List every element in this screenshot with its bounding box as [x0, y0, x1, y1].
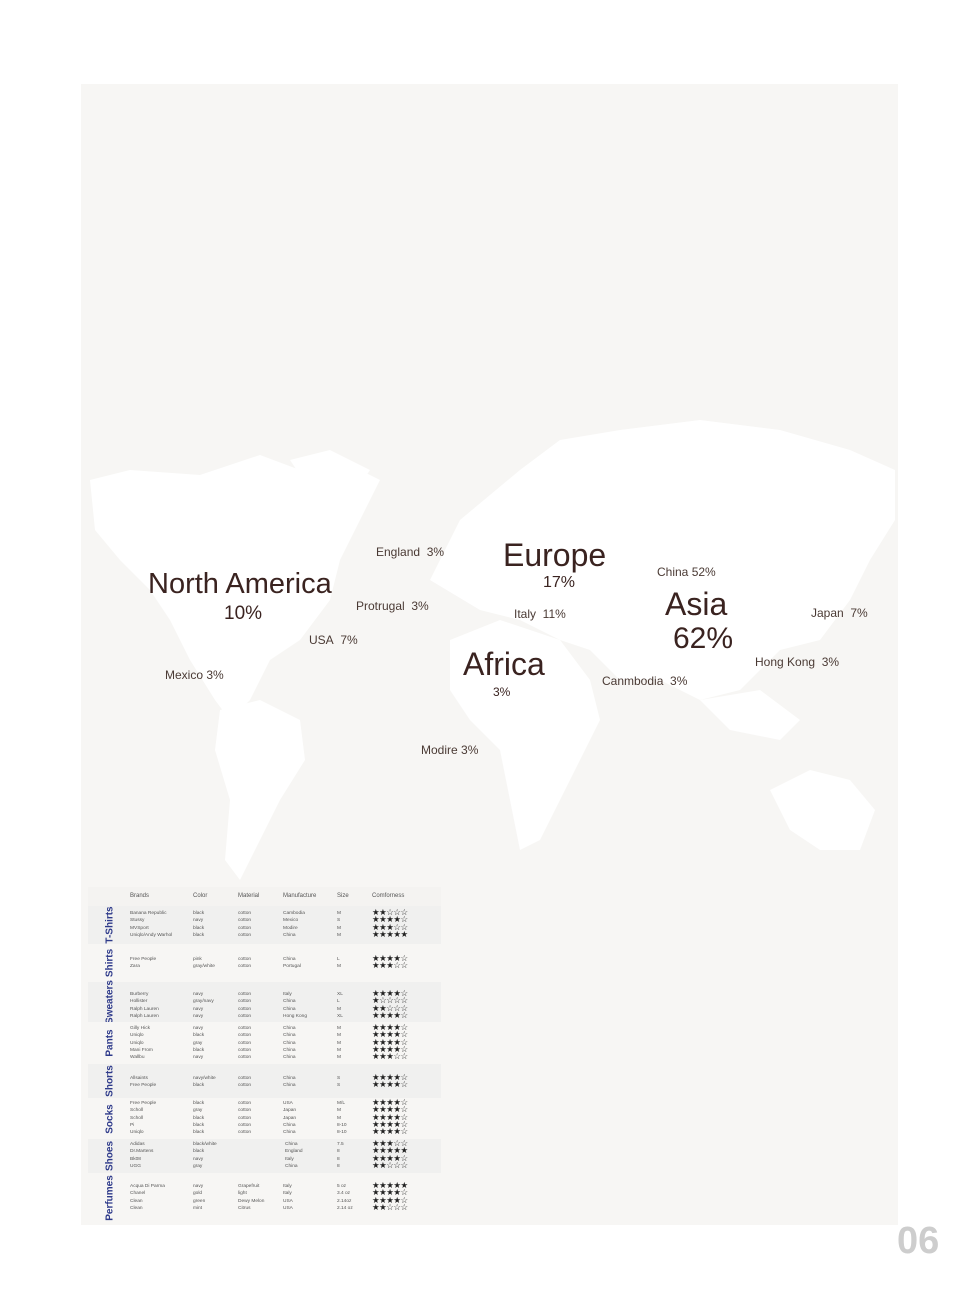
section: Perfumes: Italy Italy USA USA: [283, 1184, 293, 1211]
section: Perfumes: Grapefruit light Dewy Melon Citrus: [238, 1184, 264, 1211]
section: Pants: M M M M M: [337, 1026, 341, 1060]
table header: Comforness: [372, 893, 404, 899]
section: Shorts: Shorts: [104, 1065, 116, 1097]
section: Perfumes: [88, 1173, 441, 1223]
section: Socks: black gray black black black: [193, 1101, 204, 1135]
section: Shoes: China England Italy China: [285, 1142, 303, 1169]
section: Shorts: ★★★★☆ ★★★★☆: [372, 1073, 408, 1090]
label: England: England 3%: [376, 545, 444, 559]
section: Perfumes: Perfumes: [104, 1175, 116, 1221]
section: T-Shirts: [88, 906, 441, 944]
section: T-Shirts: ★★☆☆☆ ★★★★☆ ★★★☆☆ ★★★★★: [372, 908, 408, 940]
label: USA: USA 7%: [309, 633, 358, 647]
section: Socks: ★★★★☆ ★★★★☆ ★★★★☆ ★★★★☆ ★★★★☆: [372, 1098, 408, 1137]
section: Shoes: Shoes: [104, 1141, 116, 1171]
section: Shorts: Allsaints Free People: [130, 1076, 156, 1088]
label: Modire: Modire 3%: [421, 743, 478, 757]
section: Shorts: [88, 1064, 441, 1098]
section: Shirts: Free People Zara: [130, 957, 156, 969]
section: Shirts: Shirts: [104, 949, 116, 977]
section: Pants: navy black gray black navy: [193, 1026, 204, 1060]
section: Sweaters: navy gray/navy navy navy: [193, 992, 214, 1019]
section: Sweaters: Burberry Hollister Ralph Lauren Ralph Lauren: [130, 992, 159, 1019]
section: Shirts: pink gray/white: [193, 957, 215, 969]
background panel: [81, 84, 898, 1225]
section: T-Shirts: M S M M: [337, 911, 341, 938]
section: Perfumes: navy gold green mint: [193, 1184, 205, 1211]
section: Shirts: ★★★★☆ ★★★☆☆: [372, 954, 408, 971]
label: Africa: Africa: [463, 646, 545, 682]
section: Shorts: navy/white black: [193, 1076, 216, 1088]
label: Mexico: Mexico 3%: [165, 668, 224, 682]
table header: [88, 887, 441, 907]
section: Shoes: [88, 1139, 441, 1173]
section: Perfumes: Acqua Di Parma Chanel Clean Clean: [130, 1184, 165, 1211]
label: Asia: Asia: [665, 586, 727, 622]
table header: Brands: [130, 893, 149, 899]
section: Shoes: ★★★☆☆ ★★★★★ ★★★★☆ ★★☆☆☆: [372, 1139, 408, 1171]
section: Shirts: China Portugal: [283, 957, 301, 969]
label: Protrugal: Protrugal 3%: [356, 599, 429, 613]
section: Sweaters: Sweaters: [104, 980, 116, 1024]
section: T-Shirts: cotton cotton cotton cotton: [238, 911, 251, 938]
section: Socks: M/L M M 8-10 8-10: [337, 1101, 347, 1135]
section: Sweaters: Italy China China Hong Kong: [283, 992, 307, 1019]
section: Perfumes: 5 oz 3.4 oz 2.14oz 2.14 oz: [337, 1184, 353, 1211]
section: Socks: [88, 1098, 441, 1139]
table header: Size: [337, 893, 349, 899]
section: Shoes: 7.5 8 8 8: [337, 1142, 344, 1169]
label: Asia percent: 62%: [673, 622, 733, 655]
section: Socks: cotton cotton cotton cotton cotton: [238, 1101, 251, 1135]
section: Socks: Socks: [104, 1104, 116, 1133]
section: Pants: China China China China China: [283, 1026, 296, 1060]
page number: 06: [897, 1220, 939, 1262]
section: Shorts: cotton cotton: [238, 1076, 251, 1088]
section: Sweaters: ★★★★☆ ★☆☆☆☆ ★★☆☆☆ ★★★★☆: [372, 989, 408, 1021]
label: Canmbodia: Canmbodia 3%: [602, 674, 687, 688]
section: T-Shirts: Cambodia Mexico Modire China: [283, 911, 305, 938]
section: Perfumes: ★★★★★ ★★★★☆ ★★★★☆ ★★☆☆☆: [372, 1181, 408, 1213]
section: Pants: Gilly Hick Uniqlo Uniqlo Mani From Wallbu: [130, 1026, 153, 1060]
label: North America: North America: [148, 568, 332, 600]
section: Shoes: Adidas Dr.Martens Bk08 UGG: [130, 1142, 153, 1169]
section: Pants: [88, 1022, 441, 1064]
table header: Material: [238, 893, 259, 899]
section: T-Shirts: T-Shirts: [104, 906, 116, 944]
table header: Manufacture: [283, 893, 316, 899]
section: Shirts: cotton cotton: [238, 957, 251, 969]
section: Shirts: L M: [337, 957, 341, 969]
section: T-Shirts: Banana Republic Stussy MVSport Uniqlo/Andy Warhol: [130, 911, 172, 938]
section: Sweaters: [88, 982, 441, 1022]
label: China: China 52%: [657, 565, 716, 579]
section: Sweaters: XL L M XL: [337, 992, 343, 1019]
section: Socks: Free People Scholl Scholl Pi Uniqlo: [130, 1101, 156, 1135]
table header: Color: [193, 893, 207, 899]
label: Africa percent: 3%: [493, 685, 510, 699]
section: Sweaters: cotton cotton cotton cotton: [238, 992, 251, 1019]
label: North America percent: 10%: [224, 603, 262, 624]
section: Socks: USA Japan Japan China China: [283, 1101, 296, 1135]
section: Pants: cotton cotton cotton cotton cotton: [238, 1026, 251, 1060]
section: Shirts: [88, 944, 441, 982]
label: Japan: Japan 7%: [811, 606, 868, 620]
label: Italy: Italy 11%: [514, 607, 566, 621]
section: Shorts: S S: [337, 1076, 340, 1088]
world map: [90, 420, 895, 880]
section: Shorts: China China: [283, 1076, 296, 1088]
section: T-Shirts: black navy black black: [193, 911, 204, 938]
section: Shoes: black/white black navy gray: [193, 1142, 217, 1169]
section: Pants: ★★★★☆ ★★★★☆ ★★★★☆ ★★★★☆ ★★★☆☆: [372, 1023, 408, 1062]
section: Pants: Pants: [104, 1029, 116, 1057]
label: Hong Kong: Hong Kong 3%: [755, 655, 839, 669]
label: Europe percent: 17%: [543, 574, 575, 591]
label: Europe: Europe: [503, 537, 606, 573]
